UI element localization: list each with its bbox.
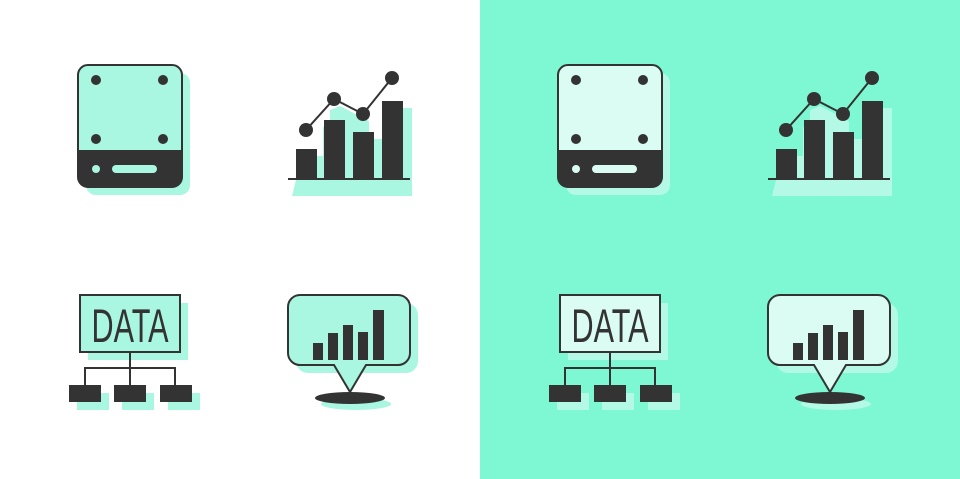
icon: growth chart (teal) [768, 71, 892, 196]
icon: data hierarchy: DATA [91, 300, 169, 353]
icon: chart speech bubble (teal) [768, 295, 898, 410]
icon: data hierarchy (teal) [549, 295, 680, 410]
left icon set [69, 65, 418, 410]
icon: data hierarchy [69, 295, 200, 410]
icon: hard drive (teal) [558, 65, 670, 195]
right background panel [480, 0, 960, 479]
icon: chart speech bubble [288, 295, 418, 410]
icon: growth chart [288, 71, 412, 196]
icon: hard drive [78, 65, 190, 195]
icon: data hierarchy (teal): DATA [571, 300, 649, 353]
right icon set [549, 65, 898, 410]
